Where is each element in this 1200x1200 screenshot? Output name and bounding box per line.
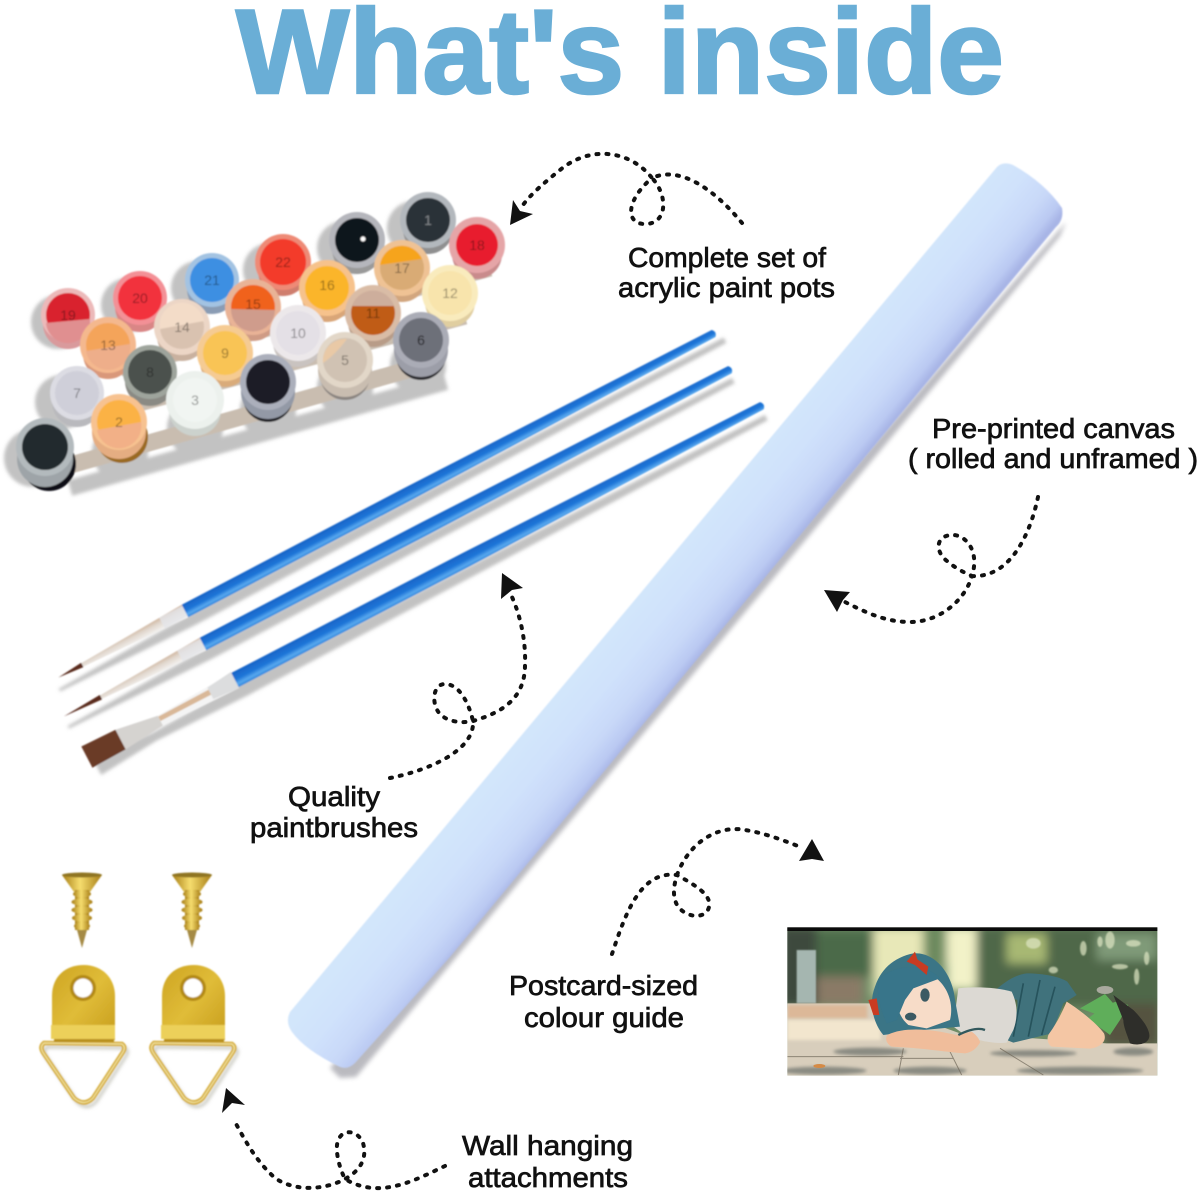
pot tray and shadows — [4, 201, 490, 488]
pot 19: 19 — [60, 307, 76, 323]
pot 6: 6 — [417, 332, 425, 348]
pot 2 — [91, 394, 148, 463]
screw 2 — [172, 872, 212, 948]
pot 3: 3 — [191, 392, 199, 408]
pot black — [329, 212, 385, 274]
illustration top edge — [787, 927, 1157, 931]
label: wall hanging: Wall hanging — [462, 1130, 633, 1161]
panel: rolled canvas — [288, 163, 1066, 1078]
pot 10: 10 — [290, 325, 306, 341]
pot 1: 1 — [424, 212, 432, 228]
pot 8: 8 — [146, 364, 154, 380]
label: paintbrushes: Quality — [288, 781, 380, 812]
label: paintbrushes: paintbrushes — [250, 812, 418, 843]
label: wall hanging: attachments — [468, 1162, 628, 1193]
pot 1 — [400, 192, 456, 254]
pot 12 — [422, 265, 478, 327]
pot 11 — [345, 285, 401, 347]
pot 11: 11 — [366, 305, 380, 321]
label: paint pots — [618, 242, 835, 303]
pot 15 — [225, 279, 281, 341]
girl ribbons — [907, 952, 928, 975]
arrow: to canvas — [824, 497, 1038, 622]
pot 21: 21 — [204, 272, 220, 288]
illustration background — [780, 927, 1163, 1076]
canvas shadow — [330, 222, 1066, 1078]
pot black bottom left — [16, 418, 76, 491]
pot 22: 22 — [275, 254, 291, 270]
arrow: to colour guide — [612, 829, 824, 954]
hanger 1 — [42, 965, 127, 1106]
pot 15: 15 — [245, 296, 261, 312]
pot 16 — [299, 260, 355, 322]
arrow: to paint pots — [510, 154, 742, 225]
girl eyes — [920, 988, 930, 1002]
brush shadows — [56, 335, 771, 775]
girl face — [897, 978, 951, 1028]
hanger 2 — [152, 965, 237, 1106]
label: canvas: ( rolled and unframed ) — [908, 443, 1198, 474]
pot 10 — [270, 305, 326, 367]
label: paintbrushes — [250, 781, 418, 843]
pot 4 — [240, 354, 296, 422]
pot 7 — [50, 366, 104, 427]
screw 1 — [62, 872, 102, 948]
pot 5: 5 — [341, 352, 349, 368]
pot 20 — [113, 271, 167, 332]
girl skirt — [993, 973, 1077, 1043]
arrow: to paintbrushes — [390, 573, 525, 778]
panel: colour guide illustration — [780, 927, 1163, 1076]
girl socks — [1080, 994, 1128, 1035]
pot 22 — [255, 234, 311, 296]
arrow: to wall hangers — [222, 1088, 445, 1188]
pot 14: 14 — [174, 319, 190, 335]
panel: paint pots — [4, 192, 505, 491]
label: paint pots: acrylic paint pots — [618, 272, 835, 303]
panel: paintbrushes — [55, 326, 771, 775]
label: colour guide: colour guide — [524, 1002, 684, 1033]
pot 5 — [317, 332, 373, 400]
illustration ground — [780, 1003, 1157, 1076]
canvas roll — [288, 163, 1062, 1068]
pot 9 — [197, 325, 253, 387]
pot 19 — [41, 288, 95, 349]
pot 14 — [154, 299, 210, 361]
girl sleeve trim — [958, 1029, 985, 1035]
pot 9: 9 — [221, 345, 229, 361]
pot 18: 18 — [469, 237, 485, 253]
girl hair back — [872, 953, 960, 1035]
brush 3 — [81, 394, 769, 768]
label: colour guide — [509, 970, 698, 1033]
pot 7: 7 — [73, 385, 81, 401]
pot 12: 12 — [442, 285, 458, 301]
panel: wall hanging hardware — [42, 872, 237, 1106]
label: colour guide: Postcard-sized — [509, 970, 698, 1001]
pot 2: 2 — [115, 414, 123, 430]
girl leg — [1048, 1002, 1105, 1049]
girl shirt — [953, 987, 1017, 1043]
pot 13: 13 — [100, 337, 116, 353]
skirt pleats — [1013, 980, 1055, 1037]
label: canvas: Pre-printed canvas — [932, 413, 1175, 444]
label: wall hanging — [462, 1130, 633, 1193]
pot 16: 16 — [319, 277, 335, 293]
pot 3 — [166, 371, 224, 436]
pot 18 — [449, 217, 505, 279]
label: canvas — [908, 413, 1198, 474]
girl shoes — [1113, 995, 1149, 1044]
girl arms — [886, 1029, 980, 1053]
pot 6 — [393, 312, 449, 380]
brush 1 — [55, 326, 719, 684]
girl figure — [868, 952, 1149, 1053]
label: paint pots: Complete set of — [628, 242, 826, 273]
pot 8 — [123, 345, 177, 406]
girl fringe — [896, 978, 938, 1013]
pot 13 — [80, 317, 136, 379]
pot 21 — [185, 253, 239, 314]
pot 20: 20 — [132, 290, 148, 306]
brush 2 — [61, 363, 735, 723]
pot 17 — [374, 240, 430, 302]
pot 17: 17 — [394, 260, 410, 276]
